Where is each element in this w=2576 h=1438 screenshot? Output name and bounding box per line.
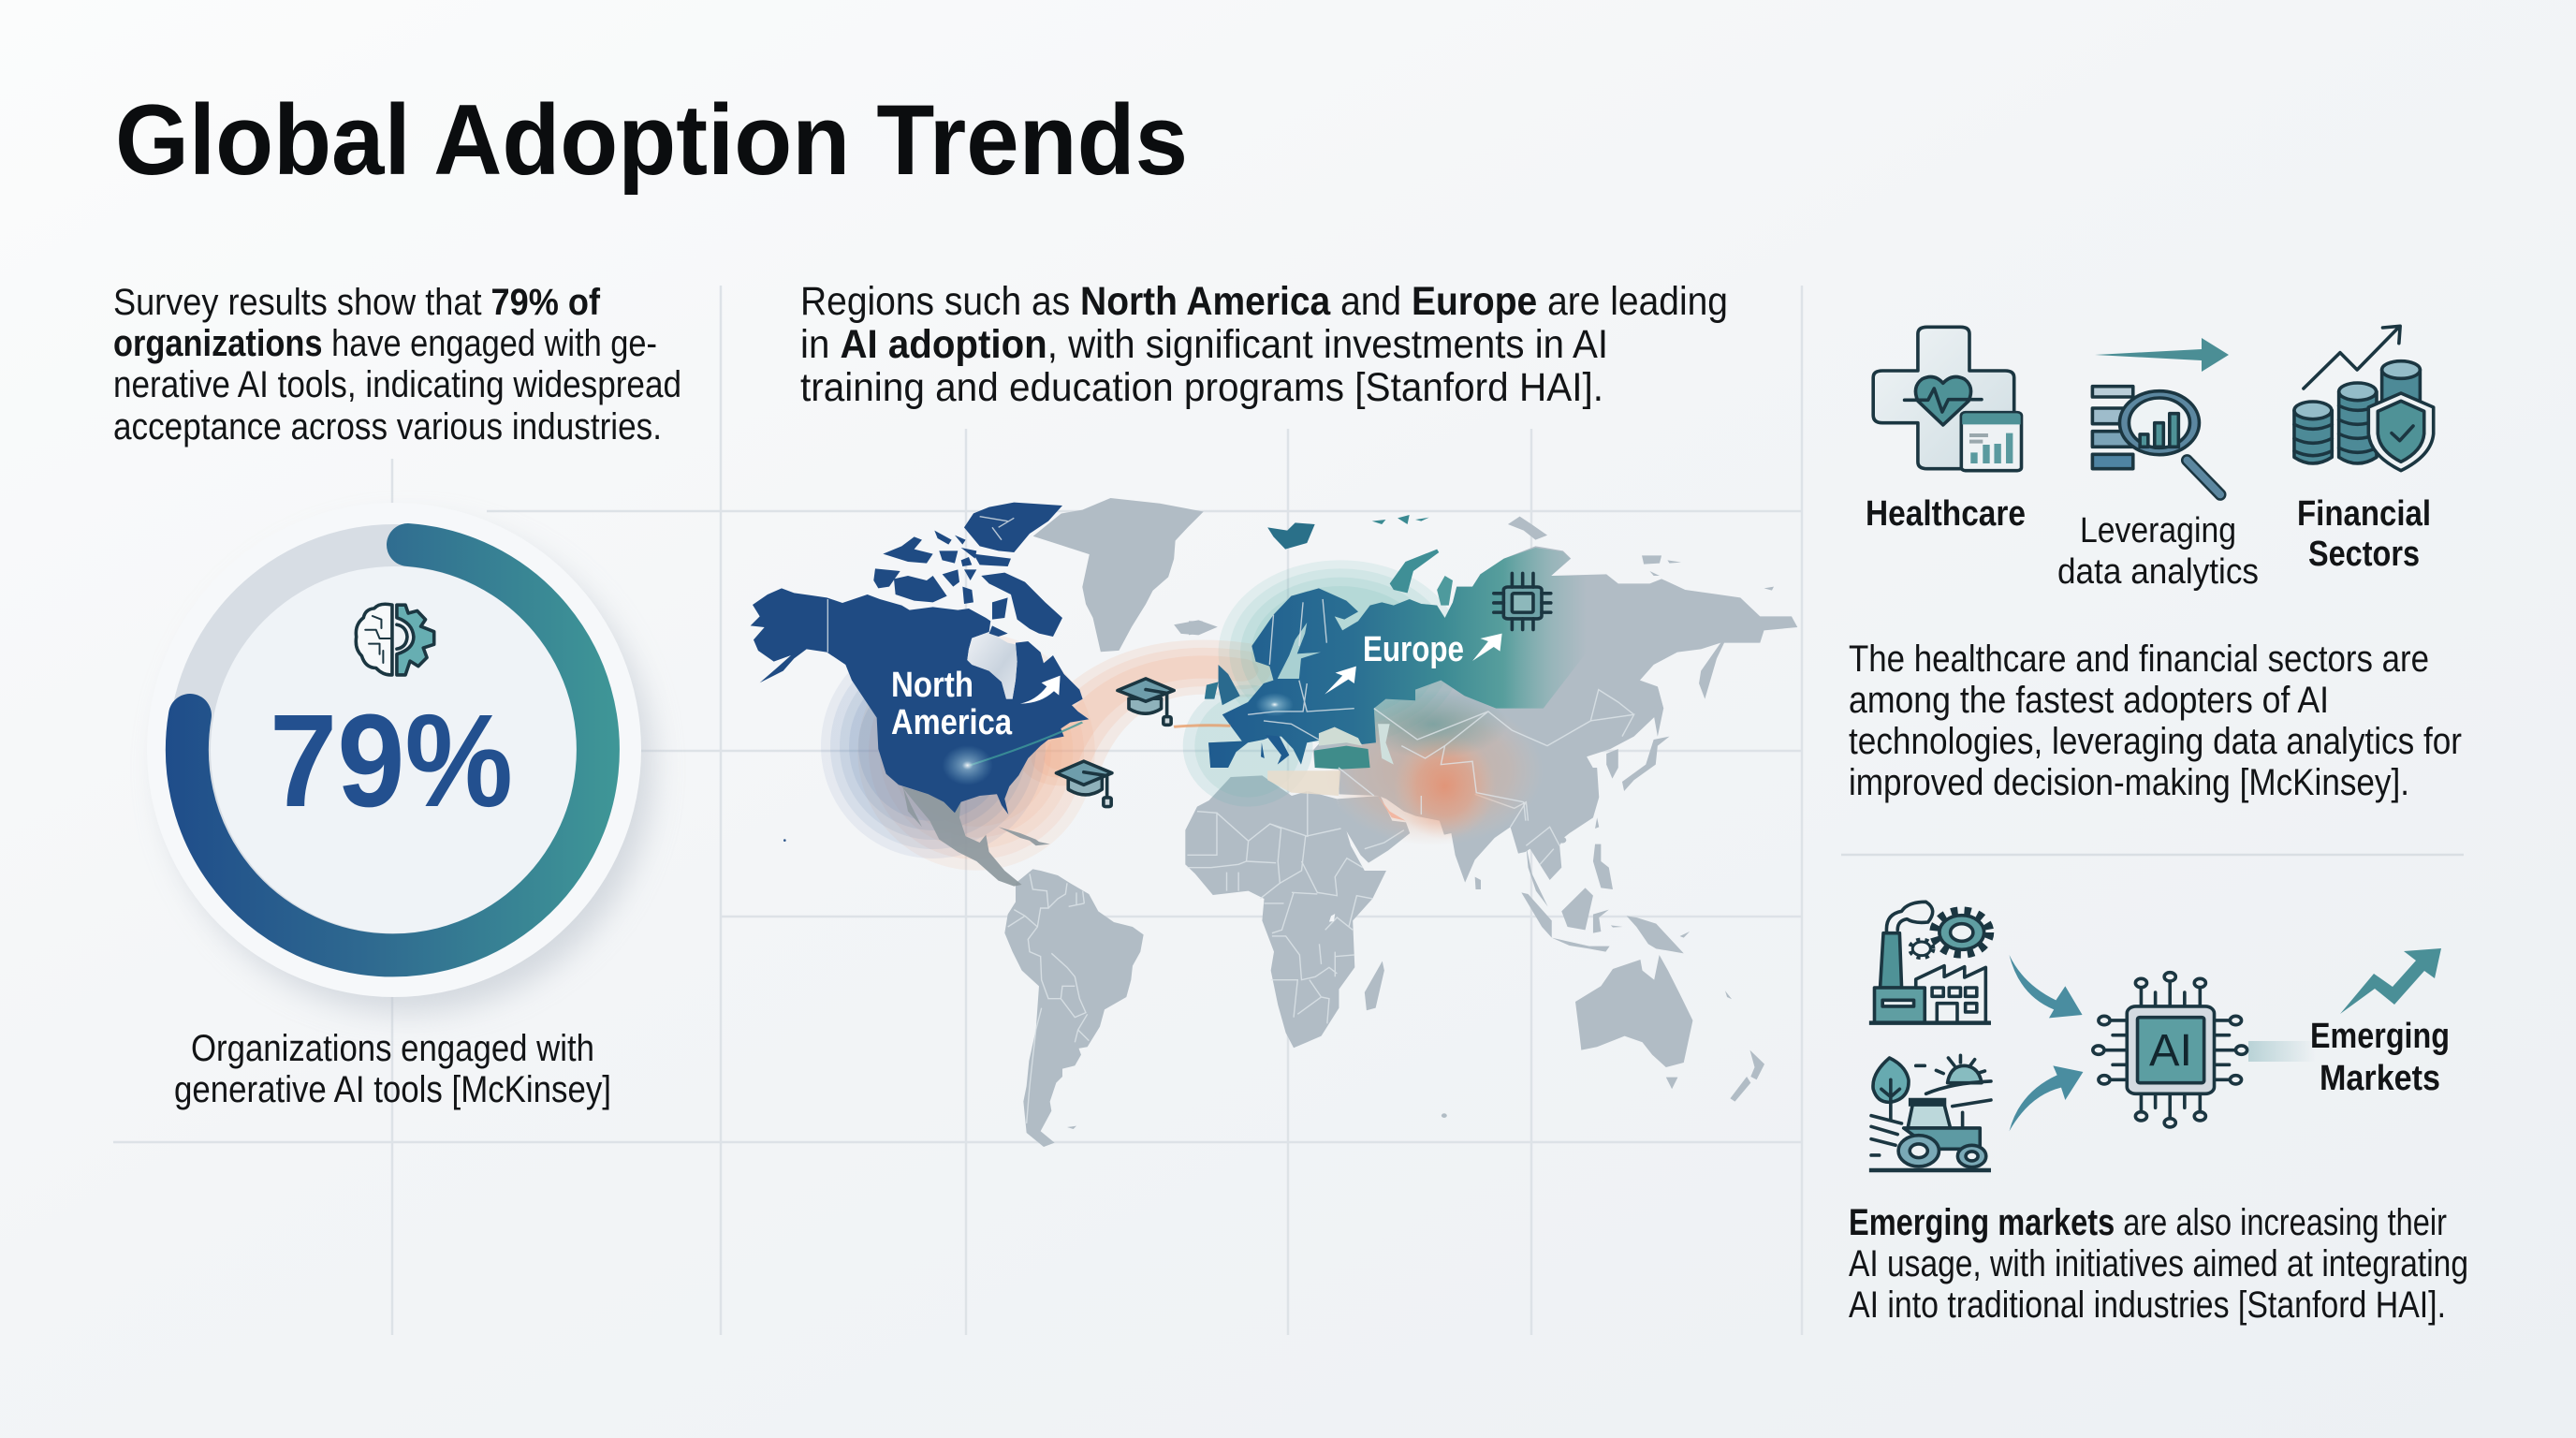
flow lines and North America glow — [943, 722, 1230, 785]
chip label: AI — [2149, 1026, 2192, 1076]
icon: data analytics — [2092, 387, 2220, 494]
text block: survey intro — [113, 282, 681, 448]
text block: sectors: The healthcare and financial sectors are — [1849, 638, 2429, 680]
donut chart: 79% — [147, 503, 653, 1013]
land: South America — [1004, 869, 1144, 1147]
text block: survey intro: nerative AI tools, indicating widespread — [113, 364, 681, 405]
haze: teal rings over Europe — [1183, 560, 1463, 807]
land: southern Asia, Africa and Oceania — [1185, 768, 1764, 1118]
region: Europe and western Russia — [1205, 515, 1634, 821]
text block: regions: in AI adoption, with significant investments in AI — [800, 322, 1608, 367]
connector fade — [2248, 1041, 2316, 1062]
label: Healthcare: Healthcare — [1866, 494, 2026, 534]
caption — [174, 1028, 611, 1110]
icon: brain and gear — [356, 604, 434, 675]
icon: graduation cap lower — [1056, 761, 1112, 807]
text block: sectors: improved decision-making [McKinsey]. — [1849, 762, 2409, 803]
center panel: regions — [751, 279, 1797, 1147]
label: Europe: Europe — [1363, 630, 1464, 669]
arrow: factory to AI — [2009, 955, 2083, 1018]
icon: financial coins and shield — [2294, 326, 2434, 471]
icon: healthcare — [1873, 327, 2022, 471]
arrow: healthcare to financial — [2095, 338, 2229, 372]
caption: Organizations engaged with — [191, 1028, 594, 1069]
icon: factory — [1869, 902, 1991, 1023]
text block: regions: training and education programs [Stanford HAI]. — [800, 365, 1603, 410]
text block: survey intro: organizations have engaged with ge- — [113, 323, 657, 364]
label: Leveraging data analytics: Leveraging — [2080, 511, 2236, 550]
arrow: Europe growth upper — [1472, 634, 1502, 661]
text block: emerging markets: AI usage, with initiatives aimed at integrating — [1849, 1243, 2468, 1284]
arrow: Europe growth lower — [1325, 667, 1356, 695]
icon: graduation cap upper — [1118, 679, 1174, 725]
right panel: sectors — [1841, 326, 2468, 1326]
label: Financial Sectors: Financial — [2297, 494, 2431, 534]
label: Emerging Markets: Emerging — [2310, 1017, 2450, 1056]
text block: sectors — [1849, 638, 2462, 803]
label: Emerging Markets: Markets — [2320, 1059, 2440, 1098]
label: North America — [891, 666, 1013, 742]
text block: regions — [800, 279, 1728, 410]
text block: emerging markets: Emerging markets are also increasing their — [1849, 1202, 2447, 1243]
big number: 79% — [270, 686, 513, 834]
text block: survey intro: Survey results show that 79% of — [113, 282, 601, 323]
label: Emerging Markets — [2310, 1017, 2450, 1098]
land: Eurasia — [1189, 517, 1797, 791]
arrow: farm to AI — [2009, 1065, 2083, 1131]
haze: blue rings — [821, 634, 1046, 858]
text block: survey intro: acceptance across various industries. — [113, 406, 662, 448]
text block: sectors: technologies, leveraging data analytics for — [1849, 721, 2462, 762]
label: Leveraging data analytics: data analytics — [2057, 552, 2259, 592]
title: Global Adoption Trends — [115, 83, 1188, 196]
region: North America — [751, 503, 1089, 814]
icon: tractor and farm — [1869, 1055, 1991, 1170]
icon: AI chip — [2093, 973, 2247, 1127]
label: Financial Sectors: Sectors — [2308, 535, 2420, 574]
left panel: survey result — [113, 282, 681, 1110]
label: Financial Sectors — [2297, 494, 2431, 574]
text block: regions: Regions such as North America and Europe are leading — [800, 279, 1728, 324]
arrow: emerging markets growth — [2340, 948, 2441, 1014]
text block: emerging markets: AI into traditional industries [Stanford HAI]. — [1849, 1284, 2446, 1326]
text block: sectors: among the fastest adopters of AI — [1849, 680, 2329, 721]
label: North America: America — [891, 703, 1013, 742]
text block: emerging markets — [1849, 1202, 2468, 1326]
arrow: North America growth — [1020, 676, 1061, 704]
land: Greenland and Iceland — [1033, 498, 1218, 652]
label: North America: North — [891, 666, 973, 705]
haze: Asia orange — [1267, 696, 1544, 845]
caption: generative AI tools [McKinsey] — [174, 1069, 611, 1110]
icon: chip — [1494, 573, 1551, 630]
region: Central America — [783, 786, 1050, 887]
grid lines — [113, 286, 1802, 1335]
world map — [751, 498, 1797, 1147]
label: Leveraging data analytics — [2057, 511, 2259, 592]
haze: orange Atlantic band — [857, 633, 1241, 871]
